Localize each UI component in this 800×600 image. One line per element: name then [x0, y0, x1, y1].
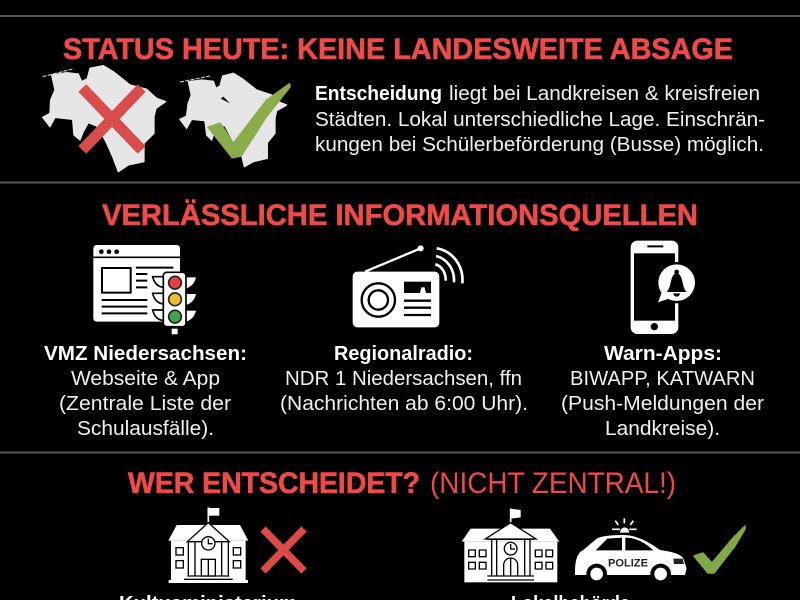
column: Regionalradio: NDR 1 Niedersachsen, ffn: [285, 368, 522, 390]
column: Regionalradio: [280, 343, 528, 415]
heading: who decides: WER ENTSCHEIDET?: [128, 467, 420, 500]
column: Warn-Apps: Landkreise).: [605, 418, 720, 440]
icon: ministry building: [168, 507, 248, 583]
column: VMZ Niedersachsen: [44, 343, 247, 440]
column: Warn-Apps: [561, 343, 764, 440]
text block: decision: Entscheidung: [315, 83, 442, 105]
text block: decision: Städten. Lokal unterschiedliche Lage. Einschrän-: [315, 109, 765, 131]
icon: radio: [353, 245, 462, 327]
heading: status today: STATUS HEUTE: KEINE LANDESWEITE ABSAGE: [63, 33, 733, 66]
heading: who decides: [128, 467, 676, 500]
icon: police car: [575, 518, 687, 584]
column: VMZ Niedersachsen: (Zentrale Liste der: [59, 393, 231, 415]
heading: who decides: (NICHT ZENTRAL!): [430, 467, 676, 500]
column: VMZ Niedersachsen: Schulausfälle).: [77, 418, 214, 440]
text block: decision: kungen bei Schülerbeförderung (Busse) möglich.: [315, 134, 764, 156]
column: VMZ Niedersachsen: Webseite & App: [71, 368, 220, 390]
icon: phone with bell: [631, 241, 697, 334]
icon: map with red cross: [43, 66, 166, 172]
icon: website with traffic light: [93, 245, 196, 334]
heading: reliable sources: VERLÄSSLICHE INFORMATIONSQUELLEN: [102, 199, 698, 232]
column: Warn-Apps: BIWAPP, KATWARN: [570, 368, 755, 390]
column: Regionalradio: Regionalradio:: [334, 343, 473, 365]
column: Regionalradio: (Nachrichten ab 6:00 Uhr).: [280, 393, 528, 415]
icon: police car: POLIZE: [608, 557, 648, 569]
text block: decision: liegt bei Landkreisen & kreisfreien: [449, 83, 760, 105]
icon: green check: [694, 526, 745, 573]
icon: map with green check: [180, 73, 290, 167]
column: VMZ Niedersachsen: VMZ Niedersachsen:: [44, 343, 247, 365]
column: Warn-Apps: (Push-Meldungen der: [561, 393, 764, 415]
column: Warn-Apps: Warn-Apps:: [604, 343, 722, 365]
icon: red cross: [263, 529, 304, 571]
text block: decision: [315, 83, 765, 156]
icon: local school building: [462, 509, 559, 582]
